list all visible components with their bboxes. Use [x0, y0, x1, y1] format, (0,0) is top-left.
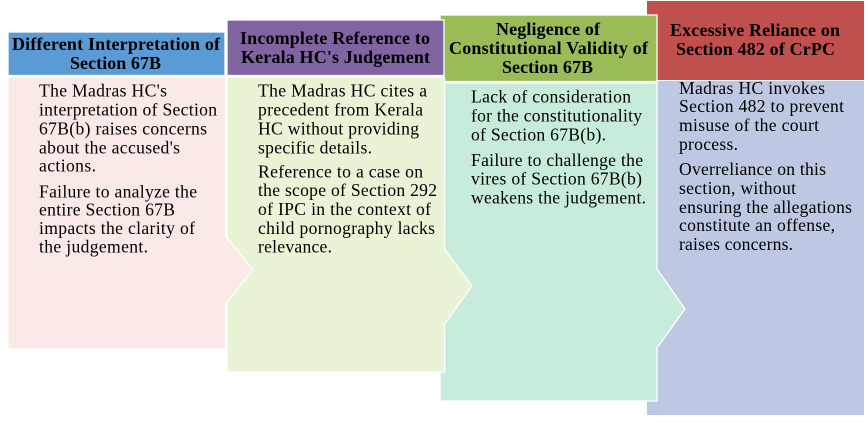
text block: panel 2: The Madras HC cites a [258, 80, 427, 100]
text block: panel 4: ensuring the allegations [679, 197, 852, 217]
text block: panel 3: of Section 67B(b). [471, 124, 606, 144]
text block: panel 2: of IPC in the context of [258, 199, 431, 219]
body block: blue [647, 81, 864, 415]
heading: panel 2 [240, 28, 430, 67]
text block: panel 4: constitute an offense, [679, 215, 835, 235]
text block: panel 2: the scope of Section 292 [258, 180, 437, 200]
text block: panel 3: Failure to challenge the [471, 150, 643, 170]
text block: panel 4: raises concerns. [679, 234, 793, 254]
body block with arrow: light green [227, 77, 472, 372]
text block: panel 1: actions. [39, 156, 96, 176]
text block: panel 1: about the accused's [39, 138, 180, 158]
text block: panel 1: entire Section 67B [39, 200, 175, 220]
text block: panel 3: Lack of consideration [471, 86, 631, 106]
panel: Excessive Reliance on Section 482 of CrPC [647, 1, 864, 415]
header block: red [647, 1, 864, 80]
heading: panel 2: Incomplete Reference to [240, 28, 430, 48]
text block: panel 1 [39, 80, 217, 256]
text block: panel 4 [679, 78, 852, 254]
text block: panel 3 [471, 86, 646, 208]
text block: panel 1: Failure to analyze the [39, 182, 197, 202]
heading: panel 1: Section 67B [70, 53, 161, 73]
text block: panel 2: precedent from Kerala [258, 100, 423, 120]
heading: panel 3: Constitutional Validity of [449, 38, 649, 58]
heading: panel 3 [449, 19, 649, 77]
heading: panel 1 [12, 34, 221, 73]
body block with arrow: mint [440, 83, 685, 401]
text block: panel 4: Section 482 to prevent [679, 96, 844, 116]
text block: panel 2: specific details. [258, 138, 372, 158]
text block: panel 2: Reference to a case on [258, 162, 423, 182]
text block: panel 3: weakens the judgement. [471, 188, 646, 208]
text block: panel 3: vires of Section 67B(b) [471, 168, 642, 188]
header block: green [440, 15, 657, 82]
heading: panel 3: Section 67B [502, 57, 593, 77]
heading: panel 4 [670, 20, 840, 59]
text block: panel 1: The Madras HC's [39, 80, 167, 100]
text block: panel 4: section, without [679, 178, 796, 198]
text block: panel 2: HC without providing [258, 118, 419, 138]
panel: Negligence of Constitutional Validity of Section 67B [440, 15, 685, 401]
heading: panel 2: Kerala HC's Judgement [241, 47, 430, 67]
panel: Incomplete Reference to Kerala HC's Judgement [227, 20, 472, 372]
text block: panel 2: relevance. [258, 236, 332, 256]
text block: panel 3: for the constitutionality [471, 106, 642, 126]
text block: panel 2: child pornography lacks [258, 218, 435, 238]
heading: panel 1: Different Interpretation of [12, 34, 221, 54]
text block: panel 4: Overreliance on this [679, 159, 826, 179]
heading: panel 4: Excessive Reliance on [670, 20, 840, 40]
panel: Different Interpretation of Section 67B [8, 32, 253, 349]
heading: panel 3: Negligence of [496, 19, 601, 39]
text block: panel 1: interpretation of Section [39, 100, 217, 120]
text block: panel 1: 67B(b) raises concerns [39, 118, 207, 138]
text block: panel 4: process. [679, 134, 738, 154]
text block: panel 2 [258, 80, 437, 256]
body block with arrow: pale pink [8, 77, 253, 349]
text block: panel 1: the judgement. [39, 236, 148, 256]
header block: purple [227, 20, 444, 76]
text block: panel 4: Madras HC invokes [679, 78, 825, 98]
text block: panel 4: misuse of the court [679, 115, 819, 135]
heading: panel 4: Section 482 of CrPC [676, 39, 835, 59]
header block: blue [8, 32, 225, 76]
text block: panel 1: impacts the clarity of [39, 218, 195, 238]
